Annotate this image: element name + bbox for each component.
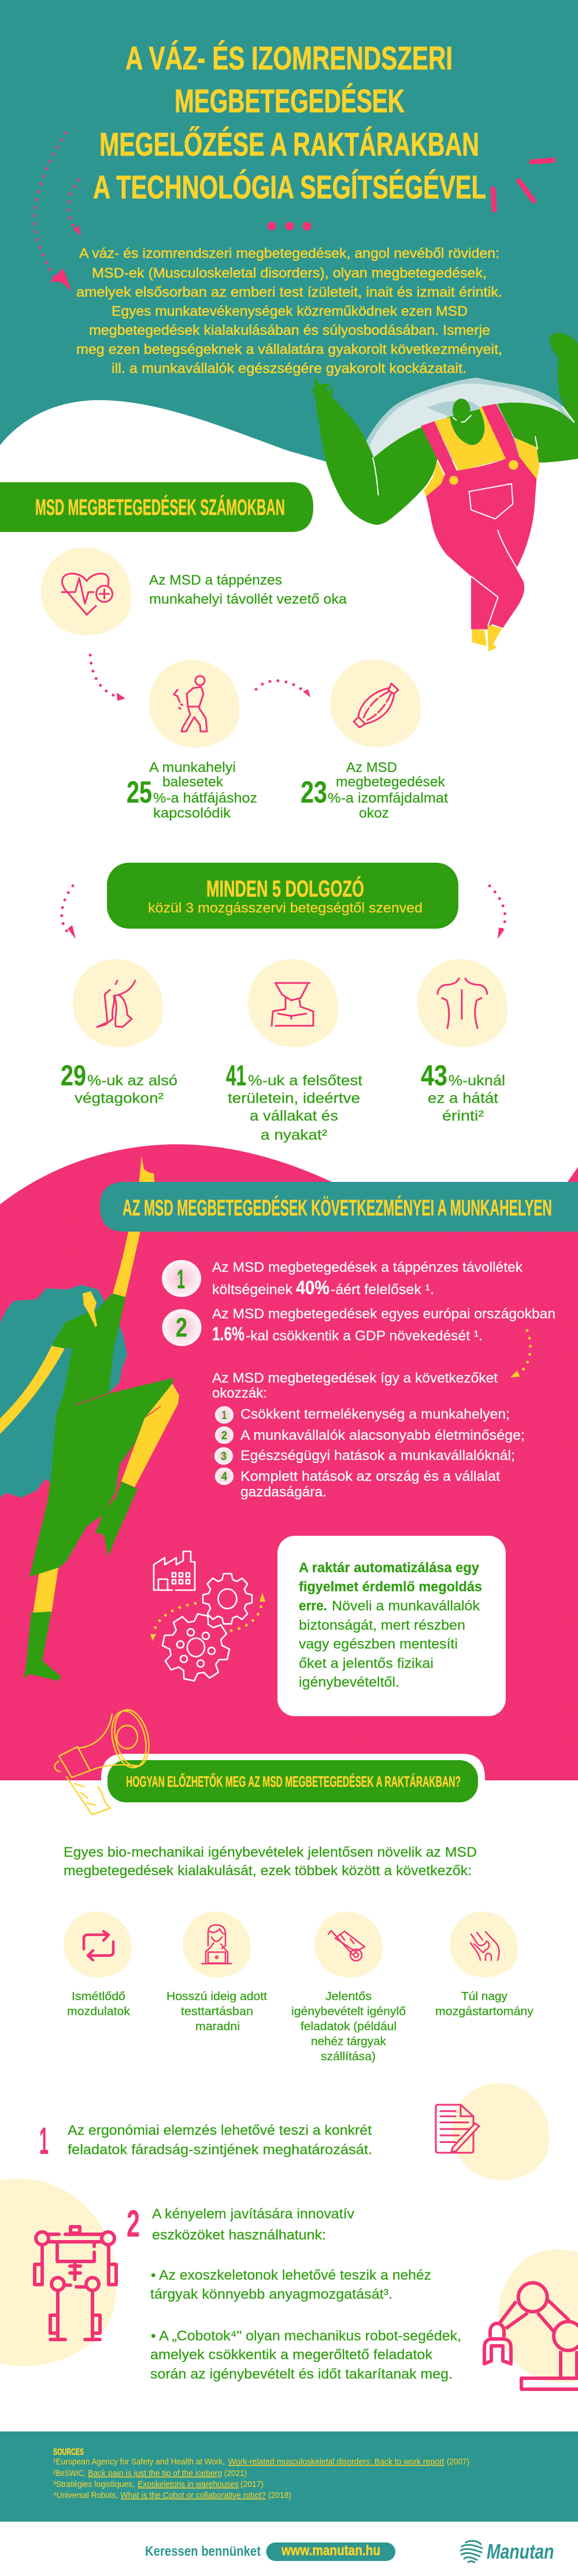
- stat: 41 percent: területein, ideértve: [228, 1091, 360, 1107]
- dotted arrow between stats: [256, 681, 310, 697]
- icon: factory: [154, 1551, 195, 1590]
- section heading pill: consequences: [100, 1182, 578, 1232]
- stat: 23 percent: megbetegedések: [336, 774, 446, 790]
- factor label: range of motion: mozgástartomány: [435, 2005, 533, 2018]
- stat: 41 percent: %-uk a felsőtest: [248, 1073, 362, 1089]
- stat: 25 percent: %-a hátfájáshoz: [153, 790, 257, 806]
- illustration: worker in pink overalls: [310, 332, 578, 652]
- white callout card: [277, 1536, 506, 1716]
- intro text block: meg ezen betegségeknek a vállalatára gyakorolt következményeit,: [76, 342, 502, 357]
- pill: every 5 workers: MINDEN 5 DOLGOZÓ: [206, 875, 364, 902]
- title: [93, 40, 486, 206]
- intro text block: megbetegedések kialakulásában és súlyosbodásában. Ismerje: [89, 323, 490, 338]
- consequence 2 text: 1.6%: [212, 1323, 244, 1344]
- sources panel: Work-related musculoskeletal disorders: Back to work report: [228, 2457, 444, 2467]
- white callout card: Növeli a munkavállalók: [332, 1598, 480, 1614]
- section heading pill: MSD in numbers: [0, 482, 313, 532]
- white callout card: A raktár automatizálása egy: [299, 1560, 480, 1576]
- number bubble 1: [162, 1260, 201, 1297]
- footer contact: Keressen bennünket: [145, 2544, 261, 2559]
- dotted arrow: long, left of title: [35, 133, 72, 291]
- stat: 41 percent: a nyakat²: [261, 1127, 327, 1143]
- icon: muscle: [331, 659, 421, 748]
- effects list: Az MSD megbetegedések így a következőket: [212, 1370, 498, 1386]
- sources panel: ⁴Universal Robots,: [53, 2490, 118, 2500]
- factor label: heavy tasks: igénybevételt igénylő: [291, 2005, 406, 2018]
- numbered step 2: során az igénybevételt és időt takarítanak meg.: [150, 2366, 453, 2382]
- pink section background: [0, 1144, 578, 1780]
- factor label: prolonged posture: Hosszú ideig adott: [166, 1990, 267, 2003]
- consequence 1 text: 40%: [296, 1277, 329, 1298]
- stat: 41 percent: a vállakat és: [250, 1108, 338, 1124]
- intro text block: Egyes munkatevékenységek közreműködnek ezen MSD: [112, 304, 468, 319]
- consequence 2 text: -kal csökkentik a GDP növekedését ¹.: [246, 1328, 483, 1344]
- consequence 1 text: [212, 1259, 523, 1298]
- dotted arrow: right of pill: [490, 886, 505, 939]
- stat: 23 percent: Az MSD: [346, 760, 397, 775]
- sources panel: (2018): [268, 2490, 291, 2500]
- stat: 25 percent: A munkahelyi: [149, 760, 236, 775]
- teal header background: [0, 0, 578, 461]
- icon: heart with pulse: [41, 548, 131, 635]
- stat text: leading cause of absence: Az MSD a táppénzes: [149, 572, 282, 588]
- sources panel: [0, 2431, 578, 2522]
- icon: hand truck with boxes: [314, 1912, 383, 1978]
- numbered step 1: [39, 2119, 372, 2162]
- stat: 25 percent: [127, 760, 257, 821]
- factor label: heavy tasks: Jelentős: [325, 1990, 372, 2003]
- logo: Manutan: [461, 2540, 554, 2563]
- pink three dots: [267, 222, 311, 230]
- dotted arrow: short, left of title: [68, 180, 81, 236]
- white callout card: erre.: [299, 1598, 327, 1614]
- icon: exoskeleton: [0, 2179, 116, 2366]
- number bubble 1: 1: [177, 1264, 185, 1294]
- effects list: Csökkent termelékenység a munkahelyen;: [240, 1406, 510, 1422]
- intro paragraph: bio-mechanical stress: [64, 1845, 477, 1879]
- numbered step 1: Az ergonómiai elemzés lehetővé teszi a konkrét: [68, 2123, 372, 2138]
- sources panel: (2007): [447, 2457, 469, 2467]
- icon: worker with back pain: [149, 660, 239, 748]
- pill: every 5 workers: [107, 863, 458, 929]
- factor label: prolonged posture: maradni: [195, 2020, 240, 2033]
- numbered step 2: [127, 2202, 461, 2382]
- effects list: Egészségügyi hatások a munkavállalóknál;: [240, 1448, 515, 1463]
- intro text block: A váz- és izomrendszeri megbetegedések, angol nevéből röviden:: [79, 246, 499, 261]
- factor label: heavy tasks: szállítása): [321, 2050, 376, 2063]
- stat text: leading cause of absence: munkahelyi távollét vezető oka: [149, 592, 347, 607]
- effects list: 3: [221, 1450, 227, 1463]
- stat: 41 percent: [226, 1059, 362, 1143]
- consequence 1 text: költségeinek: [212, 1282, 293, 1298]
- icon: woman at laptop: [183, 1912, 251, 1978]
- sources panel: SOURCES: [53, 2447, 84, 2457]
- stat: 29 percent: végtagokon²: [75, 1091, 164, 1107]
- effects list: 2: [221, 1429, 227, 1442]
- stat: 43 percent: [421, 1059, 505, 1124]
- stat: 25 percent: balesetek: [162, 774, 224, 790]
- sources panel: Back pain is just the tip of the iceberg: [88, 2468, 222, 2478]
- intro text block: MSD-ek (Musculoskeletal disorders), olyan megbetegedések,: [92, 265, 487, 281]
- stat: 23 percent: okoz: [359, 805, 389, 821]
- icon: megaphone: [55, 1706, 154, 1814]
- white callout card: vagy egészben mentesíti: [299, 1636, 458, 1652]
- title: A VÁZ- ÉS IZOMRENDSZERI: [125, 40, 453, 77]
- intro paragraph: bio-mechanical stress: Egyes bio-mechanikai igénybevételek jelentősen növelik az MSD: [64, 1845, 477, 1860]
- yellow dotted arrow: [510, 1330, 531, 1377]
- white callout card: igénybevételtől.: [299, 1675, 399, 1690]
- numbered step 1: feladatok fáradság-szintjének meghatározását.: [68, 2142, 372, 2158]
- icon: document and pen: [436, 2083, 549, 2180]
- stat: 23 percent: 23: [301, 775, 327, 810]
- factor label: heavy tasks: nehéz tárgyak: [311, 2035, 387, 2048]
- effects list: [212, 1370, 525, 1500]
- stat: 29 percent: %-uk az alsó: [87, 1073, 177, 1089]
- stat: 23 percent: %-a izomfájdalmat: [328, 790, 448, 806]
- logo: Manutan: Manutan: [487, 2540, 554, 2563]
- stat: 29 percent: 29: [61, 1059, 86, 1092]
- sources panel: ¹European Agency for Safety and Health at Work,: [53, 2457, 225, 2467]
- effects list: 1: [222, 1409, 227, 1422]
- intro text block: ill. a munkavállalók egészségére gyakorolt kockázatait.: [112, 361, 466, 376]
- sources panel: Exoskeletons in warehouses: [138, 2479, 239, 2489]
- effects list: 4: [221, 1470, 228, 1483]
- numbered step 2: A kényelem javítására innovatív: [152, 2207, 354, 2222]
- effects list: gazdaságára.: [240, 1484, 327, 1500]
- numbered step 2: amelyek csökkentik a megerőltető feladatok: [150, 2347, 433, 2363]
- pill: every 5 workers: közül 3 mozgásszervi betegségtől szenved: [148, 900, 423, 916]
- factor label: repetitive movements: [67, 1990, 131, 2018]
- numbered step 2: eszközöket használhatunk:: [152, 2227, 326, 2243]
- footer contact: www.manutan.hu: [281, 2542, 380, 2559]
- icon: gears with yellow rotating arrows: [150, 1574, 265, 1687]
- sources panel: (2021): [224, 2468, 247, 2478]
- stat: 43 percent: %-uknál: [449, 1073, 505, 1089]
- numbered step 1: 1: [39, 2119, 49, 2162]
- consequence 2 text: [212, 1306, 555, 1344]
- effects list: Komplett hatások az ország és a vállalat: [240, 1469, 500, 1484]
- numbered step 2: tárgyak könnyebb anyagmozgatását³.: [150, 2286, 392, 2302]
- title: MEGBETEGEDÉSEK: [175, 83, 405, 120]
- numbered step 2: 2: [127, 2202, 140, 2245]
- section heading pill: how to prevent: [101, 1754, 485, 1804]
- sources panel: ²BeSWIC,: [53, 2468, 86, 2478]
- stat: 43 percent: érinti²: [442, 1108, 484, 1124]
- numbered step 2: • Az exoszkeletonok lehetővé teszik a nehéz: [151, 2268, 431, 2283]
- factor label: heavy tasks: feladatok (például: [301, 2020, 397, 2033]
- pink accent dashes: [493, 160, 553, 210]
- factor label: prolonged posture: [166, 1990, 267, 2033]
- stat: 25 percent: 25: [127, 775, 152, 810]
- icon: back: [417, 959, 507, 1047]
- factor label: repetitive movements: mozdulatok: [67, 2005, 131, 2018]
- white callout card: biztonságát, mert részben: [299, 1618, 465, 1633]
- factor label: prolonged posture: testtartásban: [181, 2005, 253, 2018]
- factor label: repetitive movements: Ismétlődő: [72, 1990, 125, 2003]
- intro paragraph: bio-mechanical stress: megbetegedések kialakulását, ezek többek között a következők:: [64, 1863, 472, 1879]
- stat text: leading cause of absence: [149, 572, 347, 607]
- intro text block: amelyek elsősorban az emberi test ízületeit, inait és izmait érintik.: [76, 284, 502, 300]
- numbered step 2: • A „Cobotok⁴" olyan mechanikus robot-segédek,: [151, 2328, 461, 2344]
- dotted arrow to accident stat: [90, 655, 125, 701]
- white callout card: őket a jelentős fizikai: [299, 1656, 433, 1671]
- white callout card: figyelmet érdemlő megoldás: [299, 1579, 482, 1595]
- icon: knee joint: [450, 1912, 518, 1978]
- dotted arrow: left of pill: [62, 886, 76, 939]
- intro text block: [76, 246, 502, 376]
- stat: 43 percent: ez a hátát: [428, 1091, 498, 1107]
- consequence 1 text: -áért felelősek ¹.: [331, 1282, 434, 1298]
- illustration: woman reaching up: [0, 1156, 179, 1681]
- stat: 43 percent: 43: [421, 1059, 447, 1092]
- sources panel: (2017): [240, 2479, 264, 2489]
- consequence 1 text: Az MSD megbetegedések a táppénzes távollétek: [212, 1259, 523, 1276]
- icon: repeated movements: [64, 1912, 132, 1978]
- stat: 25 percent: kapcsolódik: [153, 805, 231, 821]
- sources panel: ³Stratégies logistiques,: [53, 2479, 135, 2489]
- number bubble 2: 2: [176, 1313, 187, 1343]
- section heading pill: MSD in numbers: MSD MEGBETEGEDÉSEK SZÁMOKBAN: [35, 495, 285, 520]
- factor label: range of motion: [435, 1990, 533, 2018]
- number bubble 2: [162, 1309, 201, 1346]
- stat: 41 percent: 41: [226, 1059, 246, 1092]
- stat: 29 percent: [61, 1059, 177, 1107]
- effects list: okozzák:: [212, 1385, 267, 1401]
- effects list: A munkavállalók alacsonyabb életminősége;: [240, 1428, 525, 1443]
- stat: 23 percent: [301, 760, 448, 821]
- factor label: range of motion: Túl nagy: [461, 1990, 507, 2003]
- icon: neck and shoulders: [248, 959, 338, 1047]
- footer contact: [145, 2542, 395, 2561]
- icon: cobot arm: [484, 2249, 578, 2389]
- sources panel: What is the Cobot or collaborative robot?: [120, 2490, 266, 2500]
- factor label: heavy tasks: [291, 1990, 406, 2063]
- icon: legs: [73, 959, 163, 1047]
- consequence 2 text: Az MSD megbetegedések egyes európai országokban: [212, 1306, 555, 1322]
